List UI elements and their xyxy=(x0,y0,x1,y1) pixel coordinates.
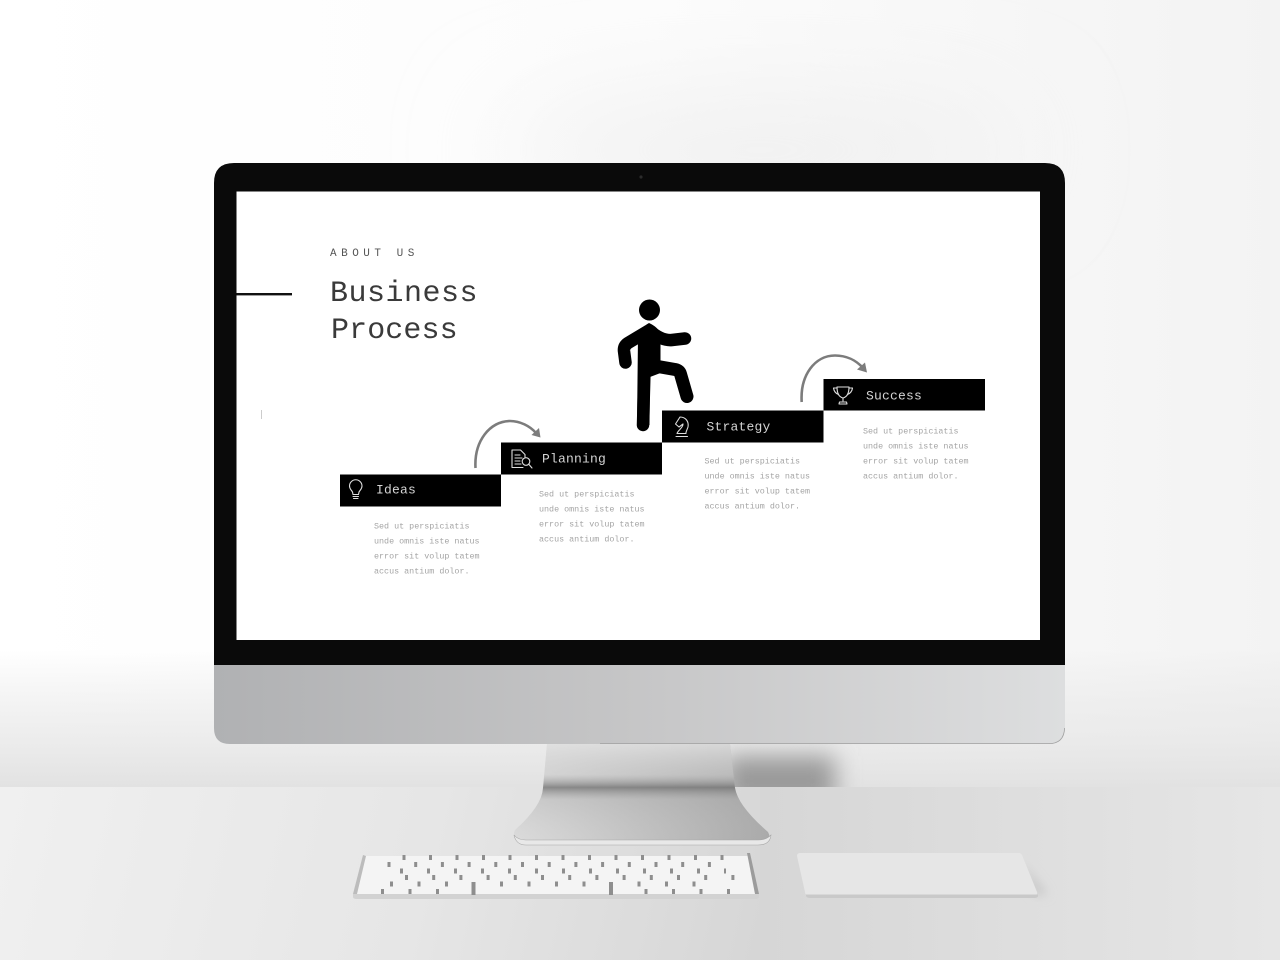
title xyxy=(330,277,478,348)
trackpad surface xyxy=(797,853,1037,895)
desk surface xyxy=(0,787,760,960)
eyebrow: ABOUT US xyxy=(330,248,419,260)
trackpad edge xyxy=(806,894,1038,898)
arrow: strategy to success xyxy=(802,356,867,402)
description: success: unde omnis iste natus xyxy=(863,442,969,452)
description: success: accus antium dolor. xyxy=(863,472,958,482)
description: planning: accus antium dolor. xyxy=(539,534,634,544)
arrow: ideas to planning xyxy=(475,421,540,468)
figure climbing stairs xyxy=(624,300,687,425)
label: ideas: Ideas xyxy=(376,482,416,498)
step: ideas xyxy=(340,474,501,576)
monitor chin xyxy=(214,665,1065,744)
keyboard base edge xyxy=(353,894,759,899)
chin bottom edge xyxy=(600,728,1065,744)
title: Business xyxy=(330,277,478,311)
description: ideas xyxy=(374,522,480,576)
description: planning xyxy=(539,490,645,544)
step: success xyxy=(824,379,985,482)
title: Process xyxy=(331,314,458,348)
keyboard body xyxy=(354,856,759,895)
desk surface right xyxy=(760,787,1280,960)
label: strategy: Strategy xyxy=(706,420,771,434)
step: strategy xyxy=(662,410,824,512)
description: success: Sed ut perspiciatis xyxy=(863,426,958,436)
description: success xyxy=(863,426,969,482)
screen xyxy=(236,192,1040,640)
description: planning: error sit volup tatem xyxy=(539,520,645,530)
description: strategy: Sed ut perspiciatis xyxy=(704,456,800,466)
trackpad xyxy=(797,853,1048,898)
monitor stand xyxy=(514,744,771,845)
description: planning: Sed ut perspiciatis xyxy=(539,490,634,500)
keyboard key gaps xyxy=(381,858,746,895)
trackpad shadow xyxy=(1022,862,1048,895)
wall soft shade behind monitor xyxy=(500,110,1020,190)
keyboard left frame xyxy=(353,855,366,894)
monitor bezel xyxy=(214,163,1065,665)
description: ideas: unde omnis iste natus xyxy=(374,536,480,546)
label: planning: Planning xyxy=(542,452,606,466)
small mark xyxy=(261,410,262,419)
keyboard right frame xyxy=(747,853,759,894)
description: strategy: error sit volup tatem xyxy=(704,486,810,496)
stand shadow on wall xyxy=(725,756,835,806)
webcam xyxy=(639,175,643,179)
description: ideas: error sit volup tatem xyxy=(374,552,480,562)
description: planning: unde omnis iste natus xyxy=(539,504,645,514)
accent line xyxy=(236,293,292,295)
description: strategy xyxy=(704,456,810,512)
description: strategy: accus antium dolor. xyxy=(704,502,800,512)
stand base rim xyxy=(514,835,771,845)
icon: light bulb xyxy=(350,480,362,498)
description: ideas: accus antium dolor. xyxy=(374,566,470,576)
description: strategy: unde omnis iste natus xyxy=(704,472,810,482)
icon: document with magnifier xyxy=(512,450,532,468)
description: ideas: Sed ut perspiciatis xyxy=(374,522,470,532)
keyboard xyxy=(353,853,759,899)
icon: chess knight xyxy=(676,417,688,436)
icon: trophy xyxy=(834,387,852,404)
slide content xyxy=(236,248,985,576)
wall shade toward horizon xyxy=(0,650,1280,788)
stand shading band xyxy=(514,744,769,842)
monitor xyxy=(214,163,1065,744)
description: success: error sit volup tatem xyxy=(863,456,969,466)
step: planning xyxy=(501,442,662,544)
label: success: Success xyxy=(866,388,922,404)
stand neck and base xyxy=(514,744,769,842)
